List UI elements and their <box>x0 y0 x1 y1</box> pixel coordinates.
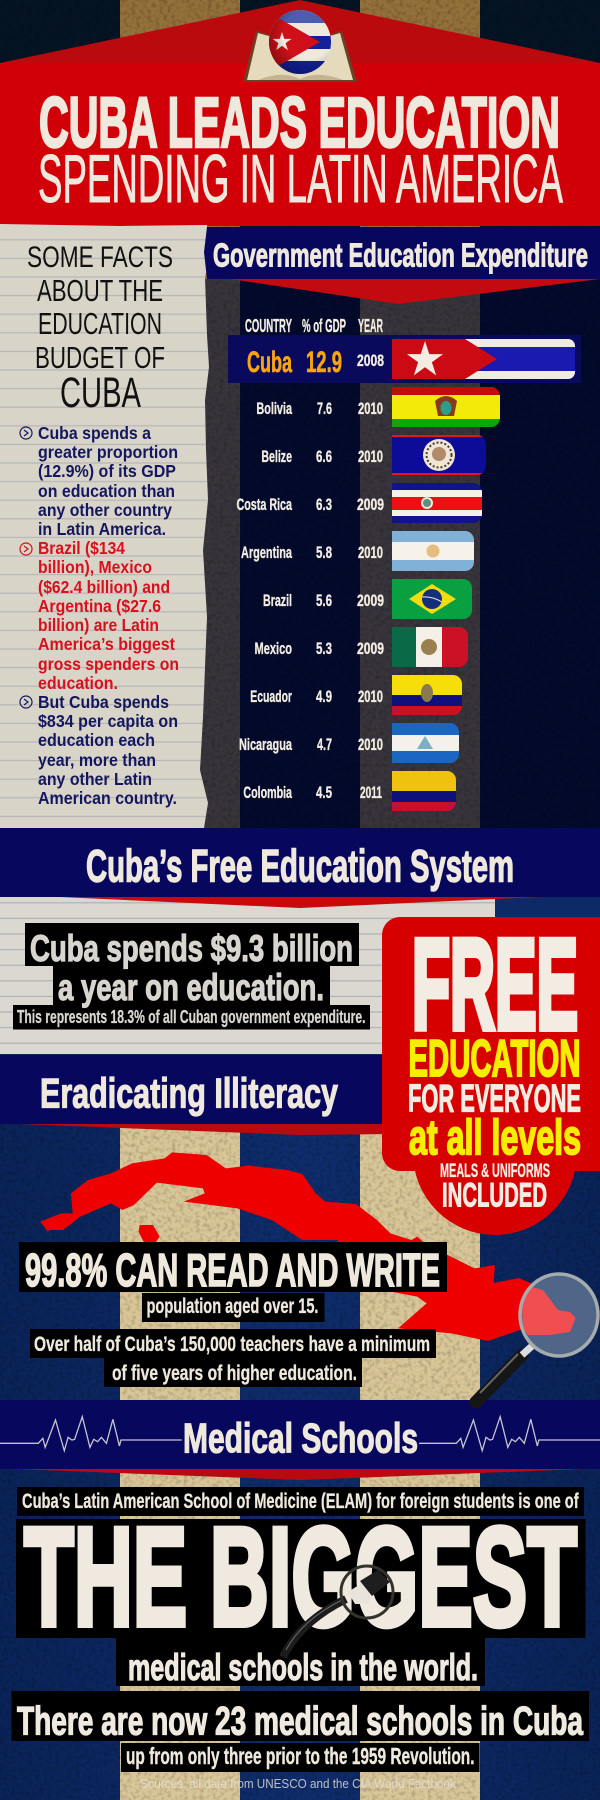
map: Cuba silhouette <box>40 1152 536 1341</box>
table row: Ecuador <box>250 675 462 715</box>
fact: biggest gross spenders: gross spenders on <box>38 654 179 674</box>
icon: Argentina flag bar <box>392 531 474 571</box>
fact: per capita spending: any other Latin <box>38 769 152 789</box>
fact: biggest gross spenders <box>20 538 179 693</box>
table row: Mexico: Mexico <box>254 639 292 658</box>
fact: biggest gross spenders: America’s biggest <box>38 634 175 654</box>
callout text: spending on education: This represents 18.3% of all Cuban government expenditure. <box>17 1007 366 1027</box>
table row: Nicaragua: 2010 <box>358 735 383 754</box>
table row: Costa Rica: Costa Rica <box>236 495 292 514</box>
icon: Costa Rica flag bar <box>392 483 482 523</box>
table row: Argentina: 5.8 <box>316 543 332 562</box>
fact: per capita spending: American country. <box>38 788 177 808</box>
fact: highest GDP proportion: any other country <box>38 500 172 520</box>
icon: stethoscope <box>283 1566 393 1657</box>
background: table stripes <box>200 279 600 829</box>
stat: literacy rate: Over half of Cuba’s 150,000 teachers have a minimum <box>34 1333 430 1356</box>
table row: Ecuador: Ecuador <box>250 687 292 706</box>
heading band: medical schools: Medical Schools <box>183 1414 418 1462</box>
table row: Nicaragua: 4.7 <box>317 735 332 754</box>
stat: literacy rate <box>19 1242 447 1387</box>
fact: highest GDP proportion: greater proportion <box>38 442 178 462</box>
fact: highest GDP proportion: Cuba spends a <box>38 423 151 443</box>
table row: Argentina <box>241 531 474 571</box>
table row: Bolivia: 7.6 <box>317 399 332 418</box>
table row: Nicaragua: Nicaragua <box>239 735 292 754</box>
table row: Costa Rica: 2009 <box>357 495 384 514</box>
table row: Belize: 2010 <box>358 447 383 466</box>
icon: Cuba flag bar <box>392 339 575 379</box>
table row: Bolivia <box>256 387 500 427</box>
table header <box>245 315 383 336</box>
fact: highest GDP proportion <box>20 423 178 539</box>
icon: magnifying glass <box>476 1274 598 1402</box>
table row: Belize <box>261 435 486 475</box>
heading band: medical schools <box>0 1400 600 1480</box>
heading band: government education expenditure <box>204 227 600 304</box>
fact: biggest gross spenders: Argentina ($27.6 <box>38 596 161 616</box>
fact: per capita spending: education each <box>38 730 155 750</box>
table row: Mexico: 2009 <box>357 639 384 658</box>
sources: Sources: all data from UNESCO and the CIA World Factbook. <box>140 1776 459 1791</box>
callout: free education badge <box>382 914 600 1235</box>
table row: Bolivia: Bolivia <box>256 399 292 418</box>
fact: highest GDP proportion: (12.9%) of its GDP <box>38 461 176 481</box>
table row: Nicaragua <box>239 723 459 763</box>
icon: Brazil flag bar <box>392 579 472 619</box>
text: 23 medical schools <box>12 1691 589 1772</box>
panel: lined paper spending section <box>0 897 600 1057</box>
icon: Bolivia flag bar <box>392 387 500 427</box>
table row: Cuba <box>228 335 581 383</box>
stat: literacy rate: of five years of higher education. <box>112 1362 357 1385</box>
text: YEAR <box>358 315 383 336</box>
table row: Brazil: Brazil <box>263 591 292 610</box>
table row: Ecuador: 2010 <box>358 687 383 706</box>
table row: Belize: 6.6 <box>316 447 332 466</box>
icon: Mexico flag bar <box>392 627 468 667</box>
heading: some facts: EDUCATION <box>38 306 162 341</box>
icon: Belize flag bar <box>392 435 486 475</box>
icon: Colombia flag bar <box>392 771 456 811</box>
table row: Mexico: 5.3 <box>316 639 332 658</box>
fact: biggest gross spenders: ($62.4 billion) and <box>38 577 170 597</box>
table row: Brazil: 5.6 <box>316 591 332 610</box>
heading band: Cuba's free education system <box>0 828 600 908</box>
background: top flag stripes <box>0 0 600 300</box>
fact: biggest gross spenders: billion), Mexico <box>38 557 152 577</box>
table row: Colombia <box>243 771 456 811</box>
table row: Colombia: 4.5 <box>316 783 332 802</box>
fact: per capita spending: But Cuba spends <box>38 692 169 712</box>
heading band: eradicating illiteracy <box>0 1055 390 1135</box>
table row: Argentina: Argentina <box>241 543 292 562</box>
icon: open book with Cuban flag globe <box>243 10 357 82</box>
icon: Nicaragua flag bar <box>392 723 459 763</box>
fact: per capita spending: year, more than <box>38 750 156 770</box>
background: lower flag stripes <box>0 1054 600 1800</box>
table row: Bolivia: 2010 <box>358 399 383 418</box>
table row: Colombia: 2011 <box>360 783 382 802</box>
heading: some facts <box>27 241 173 417</box>
icon: Ecuador flag bar <box>392 675 462 715</box>
fact: biggest gross spenders: education. <box>38 673 118 693</box>
icon: heartbeat lines <box>0 1417 600 1451</box>
heading: some facts: SOME FACTS <box>27 241 173 274</box>
title <box>38 84 563 217</box>
fact: highest GDP proportion: on education than <box>38 481 175 501</box>
table row: Cuba: 12.9 <box>306 346 342 379</box>
fact: highest GDP proportion: in Latin America. <box>38 519 166 539</box>
heading: some facts: BUDGET OF <box>35 340 165 375</box>
table row: Brazil: 2009 <box>357 591 384 610</box>
table row: Brazil <box>263 579 472 619</box>
panel: torn paper facts <box>0 224 209 828</box>
table row: Costa Rica <box>236 483 482 523</box>
table row: Belize: Belize <box>261 447 292 466</box>
stat: literacy rate: population aged over 15. <box>146 1295 318 1318</box>
table row: Costa Rica: 6.3 <box>316 495 332 514</box>
heading: some facts: ABOUT THE <box>37 273 163 308</box>
heading: some facts: CUBA <box>60 369 141 417</box>
fact: biggest gross spenders: billion) are Latin <box>38 615 159 635</box>
table row: Cuba: Cuba <box>247 346 292 379</box>
fact: per capita spending: $834 per capita on <box>38 711 178 731</box>
table row: Ecuador: 4.9 <box>316 687 332 706</box>
header red banner <box>0 0 600 226</box>
fact: biggest gross spenders: Brazil ($134 <box>38 538 125 558</box>
table row: Mexico <box>254 627 468 667</box>
heading band: eradicating illiteracy: Eradicating Illiteracy <box>40 1070 338 1116</box>
table row: Argentina: 2010 <box>358 543 383 562</box>
table row: Cuba: 2008 <box>357 351 384 370</box>
callout text: spending on education: Cuba spends $9.3 billion <box>30 928 353 969</box>
callout text: spending on education <box>13 923 370 1030</box>
fact: per capita spending <box>20 692 178 808</box>
table row: Colombia: Colombia <box>243 783 292 802</box>
table header: % of GDP <box>302 315 346 336</box>
callout text: spending on education: a year on education. <box>58 967 324 1008</box>
table header: COUNTRY <box>245 315 292 336</box>
